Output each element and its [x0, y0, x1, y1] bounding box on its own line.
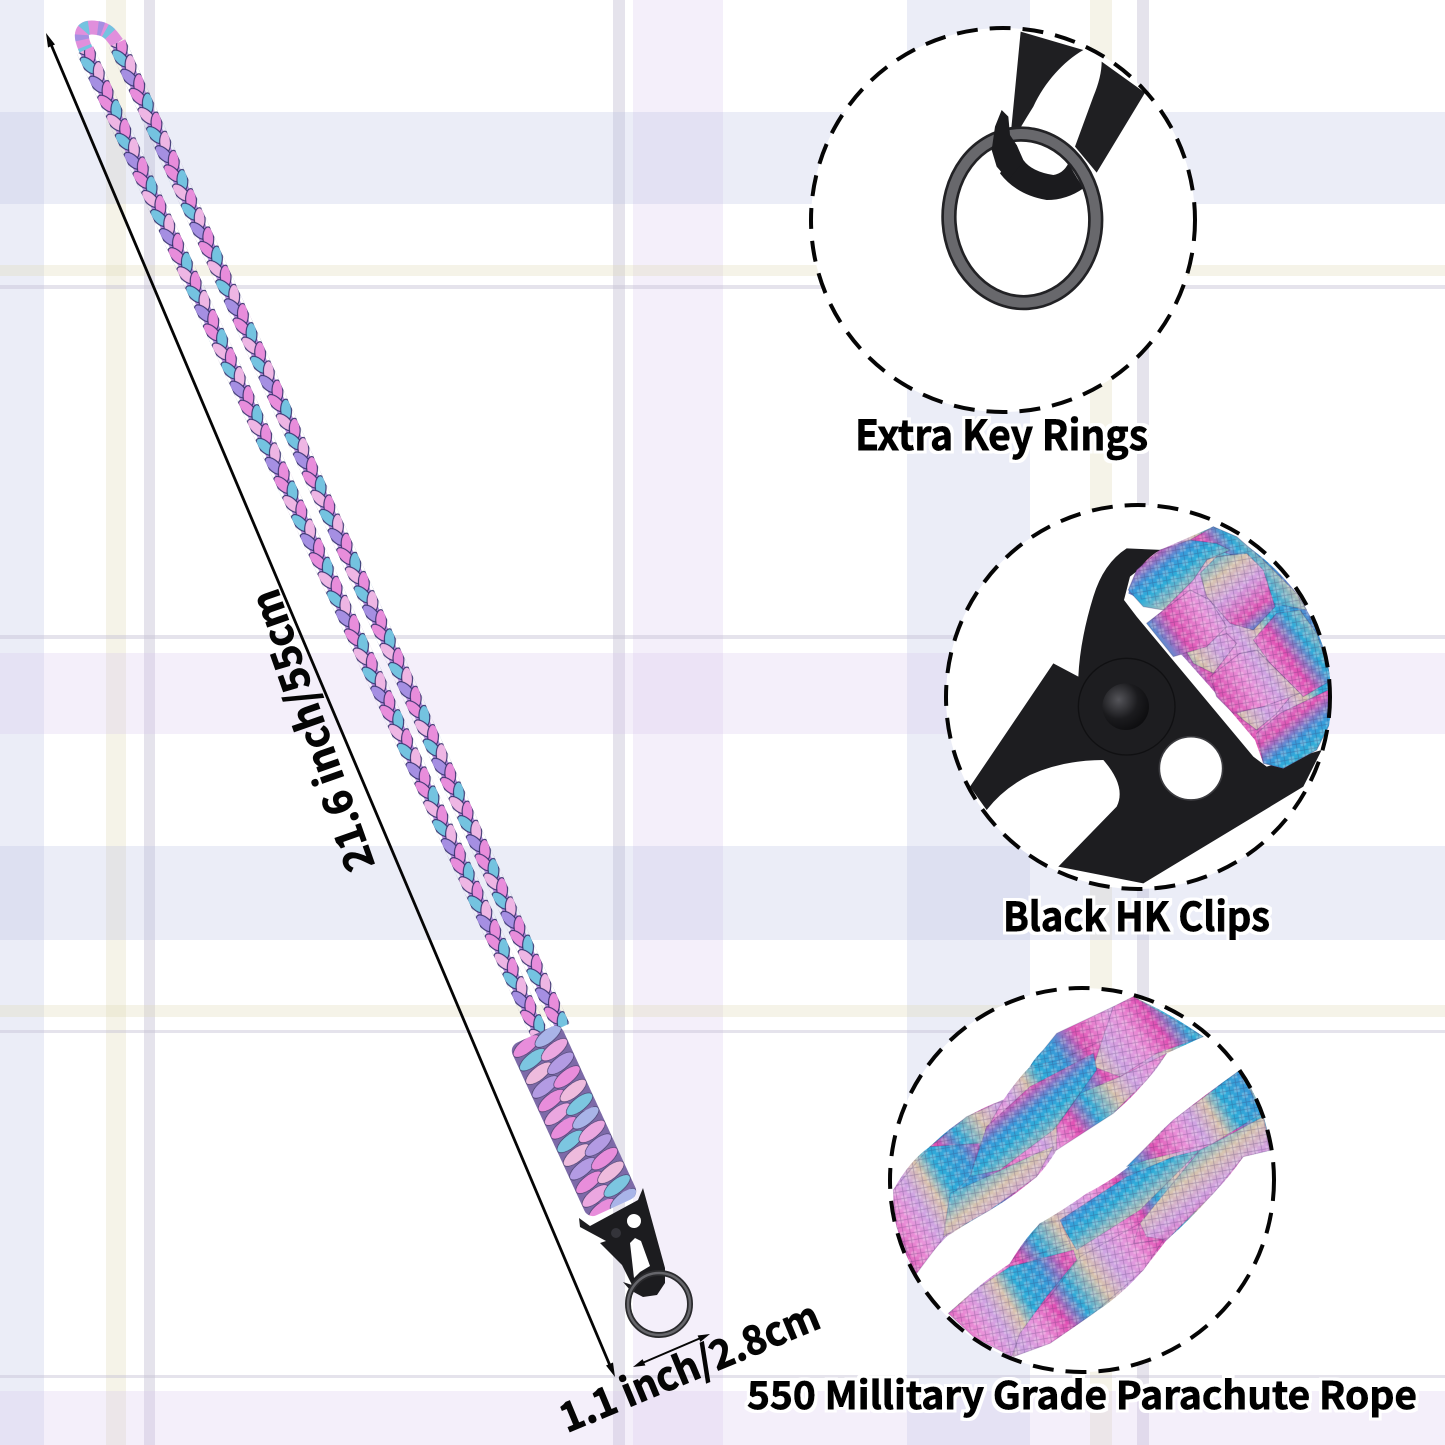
upper rope base [893, 997, 1203, 1273]
rope loop at top [82, 28, 117, 52]
rope base [1128, 527, 1332, 768]
right rope strand [109, 39, 570, 1031]
icon: carabiner clip with key ring [943, 32, 1145, 308]
width arrow [633, 1334, 710, 1367]
lower rope braid [948, 1070, 1272, 1357]
icon: braided parachute rope close-up [893, 997, 1272, 1357]
upper rope braid [893, 997, 1203, 1273]
lanyard [77, 28, 690, 1335]
braided rope lobes [1128, 527, 1332, 768]
dimension label: length: 21.6 inch/55cm [234, 583, 386, 880]
lower rope base [948, 1070, 1272, 1357]
panel: black HK clips detail [946, 505, 1332, 889]
icon: clip close-up with rope [970, 527, 1332, 883]
panel: parachute rope detail [890, 988, 1274, 1372]
small black clip [579, 1188, 665, 1297]
dimension label: width: 1.1 inch/2.8cm [549, 1284, 828, 1444]
label: parachute rope: 550 Millitary Grade Parachute Rope [747, 1365, 1417, 1420]
black clip body [970, 548, 1322, 883]
small key ring [628, 1273, 690, 1335]
cobra knot section [509, 1023, 639, 1219]
rope weave texture [893, 997, 1272, 1357]
length arrow [46, 33, 615, 1377]
label: extra key rings: Extra Key Rings [855, 402, 1148, 462]
label: black HK clips: Black HK Clips [1003, 885, 1270, 943]
panel: extra key rings detail [811, 28, 1195, 412]
rope weave texture [1128, 527, 1332, 768]
left rope strand [77, 46, 550, 1043]
